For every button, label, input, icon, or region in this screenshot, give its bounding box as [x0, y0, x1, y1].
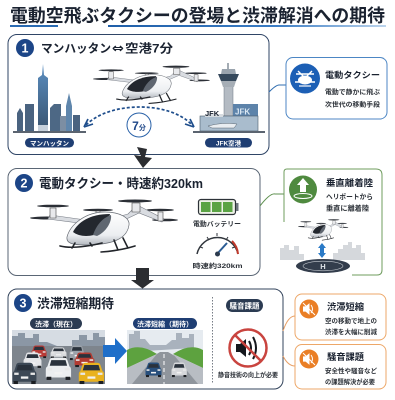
panel: electric taxi speed — [8, 168, 260, 276]
callout text: 次世代の移動手段 — [325, 100, 381, 108]
label: noise issue: 騒音課題 — [230, 300, 260, 310]
step 3 badge — [14, 294, 32, 312]
eVTOL above pad — [298, 219, 348, 240]
eVTOL illustration — [93, 66, 210, 103]
heading 1 — [41, 40, 173, 56]
step 2 badge — [15, 174, 33, 192]
icon: Manhattan skyline — [13, 64, 86, 133]
step 1 badge: 1 — [22, 42, 29, 56]
arrow: congestion to relief — [103, 338, 127, 364]
callout text: ヘリポートから — [326, 193, 373, 201]
step 2 badge: 2 — [21, 176, 28, 190]
callout title: 渋滞短縮 — [327, 301, 364, 312]
label: JFK airport: JFK空港 — [216, 138, 242, 148]
icon: up arrow over pad — [289, 176, 317, 204]
callout text: 電動で静かに飛ぶ — [325, 87, 381, 96]
heading 2: 電動タクシー・時速約320km — [39, 176, 203, 191]
icon: JFK airport: JFK — [205, 109, 220, 118]
callout text — [326, 193, 373, 212]
icon: JFK airport — [193, 63, 265, 133]
label: Manhattan — [25, 138, 74, 148]
arrow: step 1 to 2 — [134, 147, 152, 168]
city silhouette — [280, 242, 365, 260]
icon: speaker — [300, 300, 318, 318]
speed label: 時速約320km — [192, 261, 243, 270]
dashed divider — [212, 297, 214, 384]
large eVTOL illustration — [30, 200, 178, 252]
helipad: H — [320, 262, 326, 271]
label: expected reduction — [133, 318, 197, 329]
icon: speaker — [300, 350, 318, 368]
scene: congested road — [12, 330, 105, 384]
title: 電動空飛ぶタクシーの登場と渋滞解消への期待 — [10, 5, 385, 26]
callout text: 空の移動で地上の — [325, 316, 377, 325]
callout text: の課題解決が必要 — [325, 377, 376, 386]
callout text — [325, 316, 378, 336]
vertical arrow — [318, 243, 326, 258]
7 minutes badge: 7分 — [132, 119, 146, 133]
scene: clear road — [127, 330, 203, 384]
battery label: 電動バッテリー — [193, 219, 241, 228]
label: expected reduction: 渋滞短縮（期待） — [137, 320, 193, 328]
dashed flight path arrow — [84, 107, 194, 127]
connector: orange callouts — [283, 316, 295, 366]
callout text: 垂直に離着陸 — [326, 204, 369, 212]
label: JFK airport — [205, 138, 252, 148]
callout: congestion reduction — [295, 294, 386, 340]
callout title: 垂直離着陸 — [326, 177, 373, 188]
callout: noise issue — [295, 344, 386, 389]
icon: JFK airport: JFK — [235, 108, 250, 116]
callout text — [325, 366, 378, 386]
label: noise issue — [226, 299, 263, 312]
icon: drone taxi — [290, 64, 320, 94]
label: Manhattan: マンハッタン — [30, 138, 70, 148]
callout text: 安全性や騒音など — [325, 366, 378, 375]
panel: congestion reduction — [8, 289, 283, 389]
icon: speedometer — [197, 233, 238, 256]
title underline — [10, 25, 386, 27]
callout text — [325, 87, 381, 108]
heading 1: ⇔ — [112, 42, 124, 56]
panel: Manhattan to airport — [8, 34, 269, 154]
heading 3: 渋滞短縮期待 — [37, 296, 114, 311]
connector: vertical takeoff — [260, 194, 284, 206]
step 1 badge — [16, 39, 34, 57]
label: current congestion — [30, 318, 82, 329]
heading 1: 空港7分 — [125, 40, 173, 56]
heading 1: マンハッタン — [41, 42, 111, 56]
arrow: step 2 to 3 — [131, 268, 154, 288]
callout: vertical takeoff — [280, 169, 382, 275]
callout title: 騒音課題 — [327, 351, 364, 362]
icon: battery — [198, 200, 238, 214]
label: current congestion: 渋滞（現在） — [35, 320, 77, 328]
noise caption: 静音技術の向上が必要 — [218, 370, 279, 379]
callout text: 渋滞を大幅に削減 — [325, 327, 378, 336]
icon: no noise sign — [230, 330, 266, 366]
7 minutes badge — [127, 113, 151, 137]
connector: electric taxi — [269, 85, 286, 92]
callout: electric taxi — [286, 58, 387, 119]
step 3 badge: 3 — [20, 296, 27, 310]
callout title: 電動タクシー — [325, 70, 380, 80]
